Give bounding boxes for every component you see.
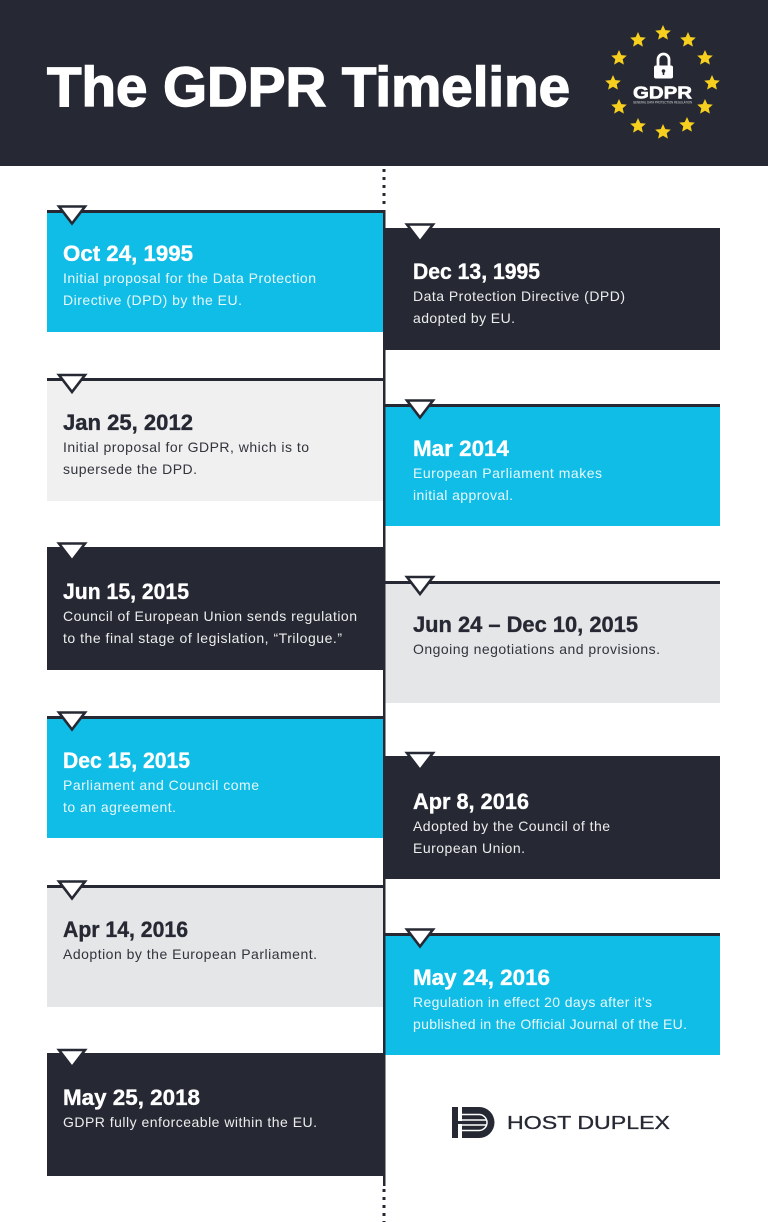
card: Jun 15, 2015: to the final stage of legislation, “Trilogue.”	[63, 630, 342, 646]
card: Mar 2014	[385, 400, 720, 526]
card: Jun 24 – Dec 10, 2015: Jun 24 – Dec 10, 2015	[413, 612, 638, 637]
card: Oct 24, 1995: Initial proposal for the Data Protection	[63, 270, 316, 286]
card: Jan 25, 2012: Jan 25, 2012	[63, 410, 193, 435]
card: Apr 8, 2016: Apr 8, 2016	[413, 789, 529, 814]
card: Mar 2014: initial approval.	[413, 487, 513, 503]
card: Jun 15, 2015: Council of European Union sends regulation	[63, 608, 357, 624]
card: Dec 13, 1995: Data Protection Directive (DPD)	[413, 288, 625, 304]
card: Jan 25, 2012: Initial proposal for GDPR, which is to	[63, 439, 309, 455]
card: May 24, 2016: Regulation in effect 20 days after it’s	[413, 994, 652, 1010]
card: Mar 2014: Mar 2014	[413, 436, 510, 461]
card: Dec 15, 2015: Dec 15, 2015	[63, 748, 190, 773]
logo: Host Duplex: HOST DUPLEX	[507, 1112, 670, 1133]
timeline centre line	[383, 210, 386, 1222]
card: Apr 8, 2016	[385, 753, 720, 879]
card: Dec 15, 2015: to an agreement.	[63, 799, 176, 815]
card: May 25, 2018: GDPR fully enforceable within the EU.	[63, 1114, 317, 1130]
card: Jun 15, 2015	[47, 544, 383, 670]
card: Oct 24, 1995: Oct 24, 1995	[63, 241, 193, 266]
card: Jun 24 – Dec 10, 2015	[385, 577, 720, 703]
card: Jun 24 – Dec 10, 2015: Ongoing negotiations and provisions.	[413, 641, 660, 657]
card: Dec 15, 2015	[47, 712, 383, 838]
card: Apr 14, 2016	[47, 882, 383, 1007]
dotted timeline top	[382, 169, 386, 208]
card: Apr 14, 2016: Adoption by the European Parliament.	[63, 946, 317, 962]
icon: GDPR badge with ring of stars and padlock: GENERAL DATA PROTECTION REGULATION	[633, 100, 692, 104]
title: The GDPR Timeline	[47, 55, 570, 118]
card: Apr 8, 2016: Adopted by the Council of the	[413, 818, 610, 834]
header band	[0, 0, 768, 166]
card: Apr 14, 2016: Apr 14, 2016	[63, 917, 188, 942]
card: May 24, 2016	[385, 930, 720, 1055]
logo: Host Duplex	[452, 1107, 670, 1138]
card: May 24, 2016: May 24, 2016	[413, 965, 550, 990]
card: Dec 13, 1995	[385, 224, 720, 350]
icon: GDPR badge with ring of stars and padlock: GDPR	[633, 82, 692, 102]
card: May 24, 2016: published in the Official Journal of the EU.	[413, 1016, 687, 1032]
card: Oct 24, 1995: Directive (DPD) by the EU.	[63, 292, 242, 308]
icon: GDPR badge with ring of stars and padlock	[605, 25, 720, 139]
card: Oct 24, 1995	[47, 206, 383, 332]
card: Jan 25, 2012: supersede the DPD.	[63, 461, 197, 477]
card: Jan 25, 2012	[47, 375, 383, 501]
card: May 25, 2018: May 25, 2018	[63, 1085, 200, 1110]
card: Dec 13, 1995: adopted by EU.	[413, 310, 515, 326]
card: Dec 15, 2015: Parliament and Council come	[63, 777, 259, 793]
card: Dec 13, 1995: Dec 13, 1995	[413, 259, 540, 284]
card: May 25, 2018	[47, 1050, 383, 1176]
card: Apr 8, 2016: European Union.	[413, 840, 525, 856]
card: Mar 2014: European Parliament makes	[413, 465, 602, 481]
card: Jun 15, 2015: Jun 15, 2015	[63, 579, 189, 604]
